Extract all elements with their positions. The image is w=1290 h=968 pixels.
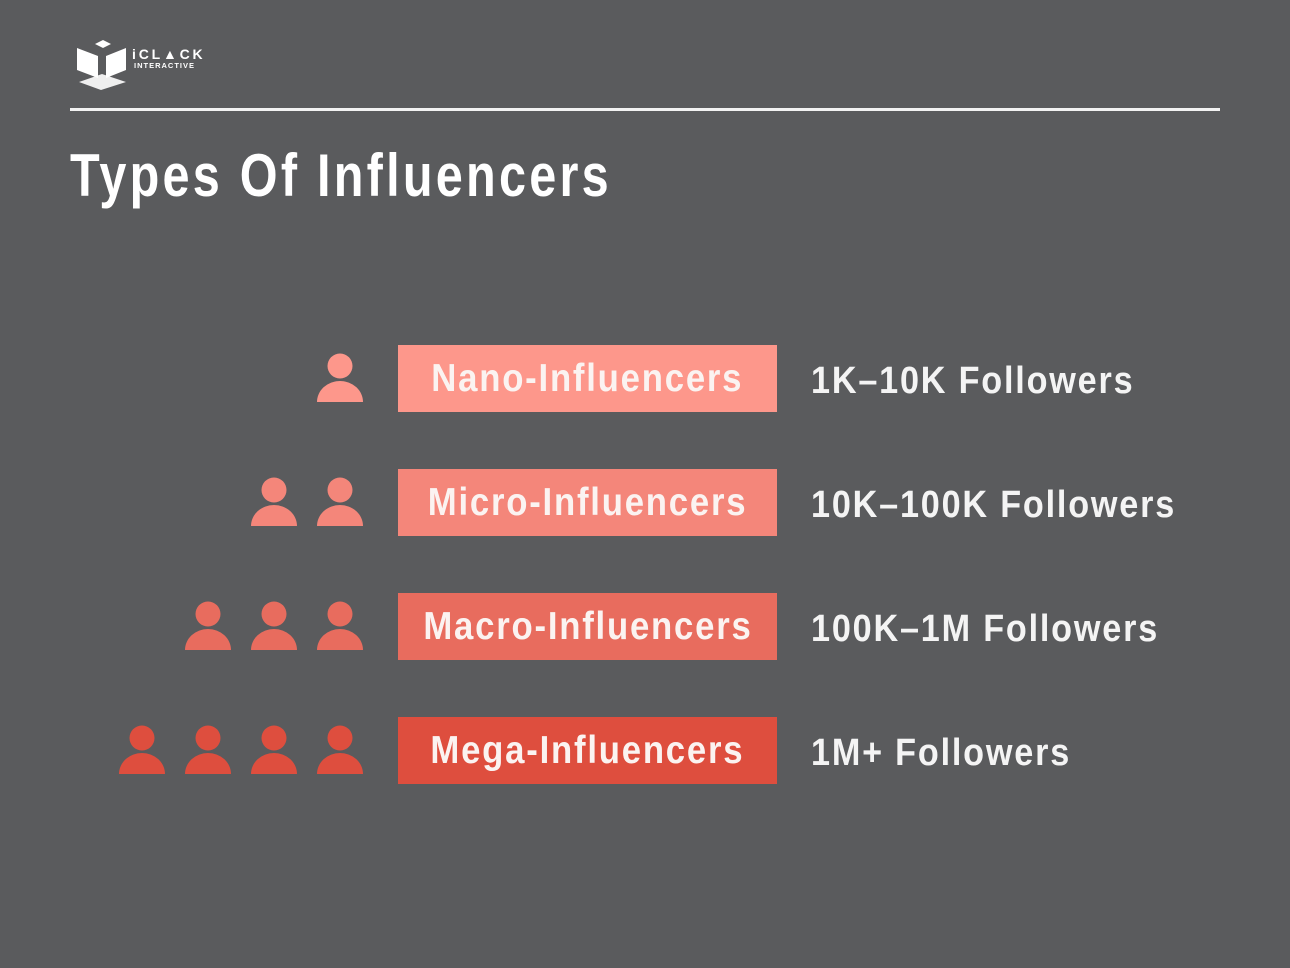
title: Types Of Influencers xyxy=(70,142,612,209)
row: mega xyxy=(119,717,1071,784)
row: macro xyxy=(185,593,1159,660)
row: micro xyxy=(251,469,1176,536)
logo xyxy=(77,40,205,90)
row: mega: 1M+ Followers xyxy=(811,732,1071,774)
row: macro: Macro-Influencers xyxy=(423,604,752,648)
logo: INTERACTIVE xyxy=(134,61,195,70)
row: micro: Micro-Influencers xyxy=(428,480,747,524)
row: mega: Mega-Influencers xyxy=(431,728,744,772)
row: nano: 1K–10K Followers xyxy=(811,360,1134,402)
row: nano: Nano-Influencers xyxy=(431,356,744,400)
logo: iCL▲CK xyxy=(132,46,205,62)
row: micro: 10K–100K Followers xyxy=(811,484,1176,526)
row: nano xyxy=(317,345,1134,412)
row: macro: 100K–1M Followers xyxy=(811,608,1159,650)
